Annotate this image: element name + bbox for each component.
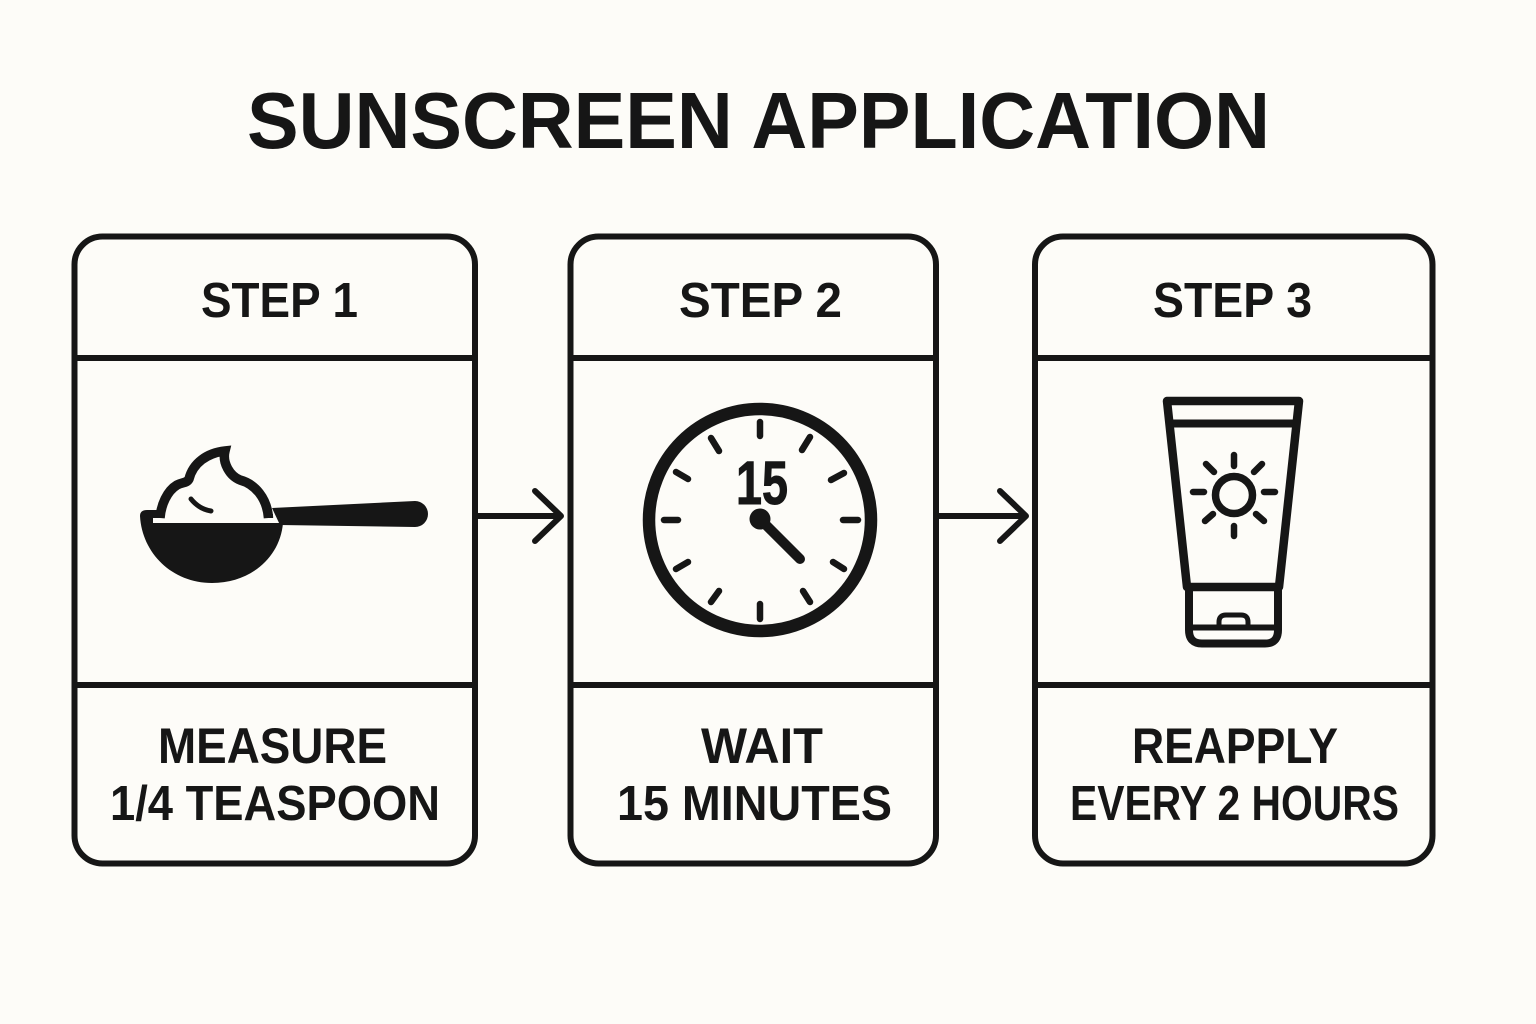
step 3 caption: REAPPLY xyxy=(1132,718,1338,774)
icon: clock showing 15: 15 xyxy=(736,449,788,517)
title: SUNSCREEN APPLICATION xyxy=(247,76,1270,165)
panel: step 1 xyxy=(74,236,475,864)
panel: step 3 xyxy=(1035,236,1433,864)
arrow: step 1 to step 2 xyxy=(478,491,561,541)
icon: measuring spoon with sunscreen xyxy=(140,451,428,583)
step 2 caption xyxy=(617,718,892,831)
step 1 caption: 1/4 TEASPOON xyxy=(110,777,440,831)
icon: sunscreen tube xyxy=(1167,401,1299,644)
step 3 caption: EVERY 2 HOURS xyxy=(1070,777,1399,831)
step 2 caption: WAIT xyxy=(701,718,823,774)
step 3 heading: STEP 3 xyxy=(1153,274,1312,328)
step 1 caption: MEASURE xyxy=(158,718,387,774)
panel: step 2 xyxy=(570,236,936,864)
step 2 caption: 15 MINUTES xyxy=(617,777,892,831)
arrow: step 2 to step 3 xyxy=(938,491,1026,541)
step 3 caption xyxy=(1070,718,1399,831)
step 1 caption xyxy=(110,718,440,831)
step 1 heading: STEP 1 xyxy=(201,274,358,328)
step 2 heading: STEP 2 xyxy=(679,274,842,328)
icon: clock showing 15 xyxy=(649,409,871,631)
